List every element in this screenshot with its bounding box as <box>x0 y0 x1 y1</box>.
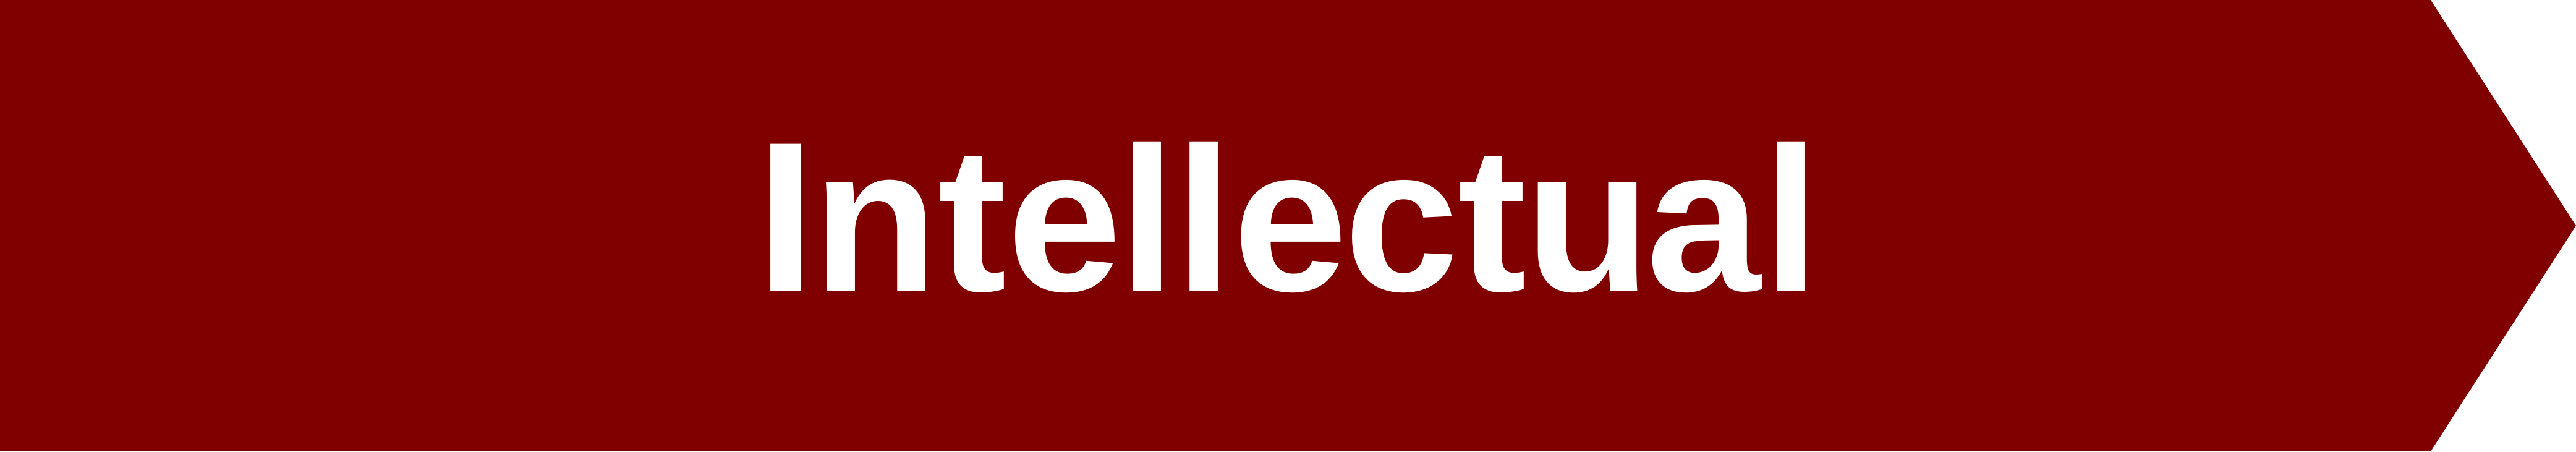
heading: Intellectual: Intellectual <box>756 98 1820 336</box>
